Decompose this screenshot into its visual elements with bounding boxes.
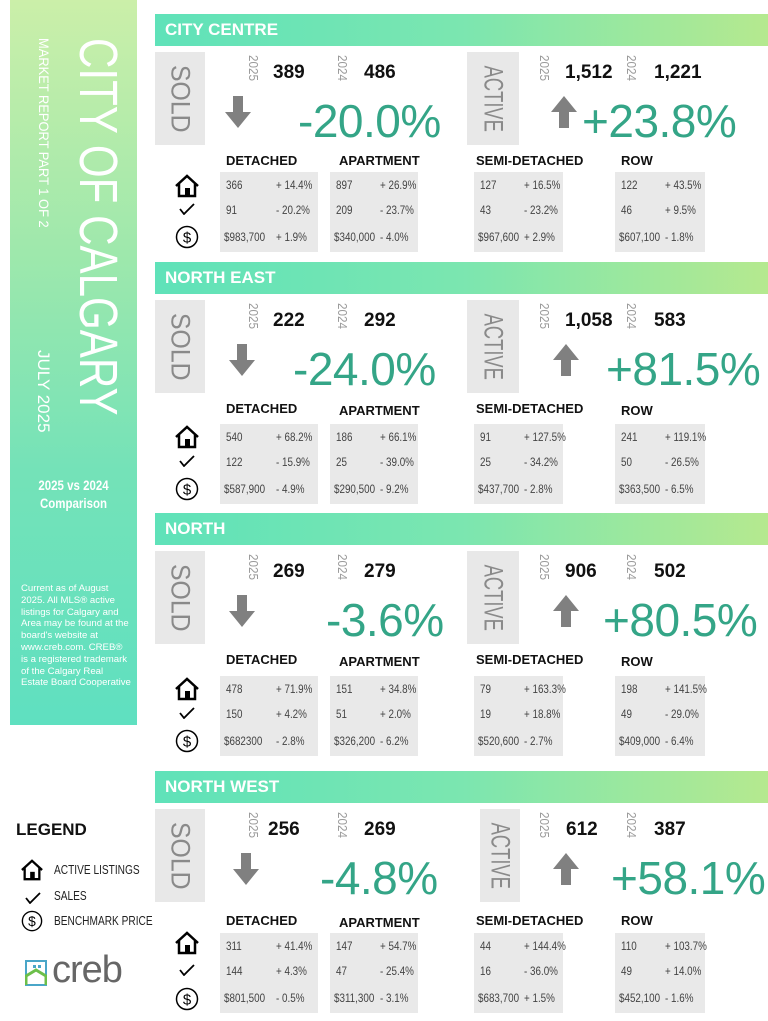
sold numbers — [246, 554, 396, 582]
table: semi-detached: + 127.5% — [524, 430, 566, 444]
table: semi-detached: + 16.5% — [524, 178, 560, 192]
section: north east: APARTMENT — [339, 403, 420, 418]
row icons — [175, 931, 199, 1010]
section: north: SEMI-DETACHED — [476, 652, 583, 667]
table: apartment: 209 — [336, 203, 352, 217]
section: north east: 2024 — [335, 303, 350, 329]
table: detached: 122 — [226, 455, 242, 469]
table: apartment: 897 — [336, 178, 352, 192]
table: row: 49 — [621, 707, 632, 721]
section: north west: 2024 — [335, 812, 350, 838]
sold numbers — [246, 812, 396, 840]
sold box: SOLD — [166, 313, 196, 380]
table: apartment: + 34.8% — [380, 682, 416, 696]
table: row: + 43.5% — [665, 178, 701, 192]
table: row: - 6.5% — [665, 482, 693, 496]
section: north east: 2025 — [246, 303, 261, 329]
table: detached: $587,900 — [224, 482, 265, 496]
section: north east: 1,058 — [565, 310, 613, 331]
table: semi-detached: 16 — [480, 964, 491, 978]
table: semi-detached: - 2.8% — [524, 482, 552, 496]
table: row: - 6.4% — [665, 734, 693, 748]
table: row: + 141.5% — [665, 682, 707, 696]
section: north west: 387 — [654, 819, 686, 840]
creb logo: creb — [52, 949, 122, 991]
section: north west: 256 — [268, 819, 300, 840]
up arrow — [553, 344, 579, 376]
table: semi-detached: - 23.2% — [524, 203, 558, 217]
section: north west — [155, 771, 768, 1013]
legend item: benchmark price — [22, 910, 153, 932]
section: north west: APARTMENT — [339, 915, 420, 930]
section: north west: 612 — [566, 819, 598, 840]
active box — [467, 52, 519, 145]
table: apartment: - 9.2% — [380, 482, 408, 496]
table: semi-detached: $967,600 — [478, 230, 519, 244]
row icons — [175, 425, 199, 500]
table: row: + 103.7% — [665, 939, 707, 953]
table: semi-detached: + 144.4% — [524, 939, 566, 953]
active box: ACTIVE — [478, 65, 508, 132]
table: detached: $801,500 — [224, 991, 265, 1005]
header — [155, 14, 768, 46]
active box — [467, 300, 519, 393]
table: semi-detached: $437,700 — [478, 482, 519, 496]
table: row — [615, 676, 705, 756]
sold box — [155, 52, 205, 145]
section: north: 906 — [565, 561, 597, 582]
sold box: SOLD — [166, 65, 196, 132]
table: semi-detached: + 18.8% — [524, 707, 560, 721]
table: detached: + 4.3% — [276, 964, 307, 978]
table: apartment: $311,300 — [334, 991, 374, 1005]
table: row: $607,100 — [619, 230, 660, 244]
table: row: 46 — [621, 203, 632, 217]
sold box: SOLD — [166, 822, 196, 889]
section: city centre: ROW — [621, 153, 653, 168]
table: semi-detached: $520,600 — [478, 734, 519, 748]
up arrow — [551, 96, 577, 128]
down arrow — [229, 595, 255, 627]
active percent: +80.5% — [603, 594, 757, 646]
section: north east: ROW — [621, 403, 653, 418]
table: row: 241 — [621, 430, 637, 444]
table: apartment: - 6.2% — [380, 734, 408, 748]
sold box — [155, 809, 205, 902]
section: north: ROW — [621, 654, 653, 669]
section: north: DETACHED — [226, 652, 297, 667]
table: semi-detached: 91 — [480, 430, 491, 444]
row icons — [175, 677, 199, 752]
header: CITY CENTRE — [165, 20, 278, 39]
table: detached: + 68.2% — [276, 430, 312, 444]
table: detached: - 2.8% — [276, 734, 304, 748]
table: row: $409,000 — [619, 734, 660, 748]
table: apartment — [330, 676, 418, 756]
section: north east: 222 — [273, 310, 305, 331]
legend item: active listings: ACTIVE LISTINGS — [54, 862, 140, 877]
table: detached: - 0.5% — [276, 991, 304, 1005]
table: apartment: $290,500 — [334, 482, 375, 496]
sold percent: -24.0% — [293, 343, 436, 395]
table: semi-detached: - 34.2% — [524, 455, 558, 469]
header — [155, 513, 768, 545]
table: row: + 14.0% — [665, 964, 701, 978]
section: north east — [155, 262, 768, 504]
section: north west: 2025 — [537, 812, 552, 838]
table: semi-detached — [474, 933, 563, 1013]
active percent: +58.1% — [611, 852, 765, 904]
table: semi-detached: - 2.7% — [524, 734, 552, 748]
table: detached: 91 — [226, 203, 237, 217]
section: north: 269 — [273, 561, 305, 582]
header: NORTH EAST — [165, 268, 276, 287]
table: detached: $983,700 — [224, 230, 265, 244]
header: NORTH — [165, 519, 225, 538]
table: row: - 1.8% — [665, 230, 693, 244]
table: detached: + 1.9% — [276, 230, 307, 244]
table: detached: 366 — [226, 178, 242, 192]
table: row: 198 — [621, 682, 637, 696]
section: north: 2024 — [624, 554, 639, 580]
section: north: 2024 — [335, 554, 350, 580]
section: north east: 292 — [364, 310, 396, 331]
header — [155, 771, 768, 803]
table: detached — [220, 424, 318, 504]
section: north west: 2024 — [624, 812, 639, 838]
legend item: benchmark price: BENCHMARK PRICE — [54, 913, 153, 928]
section: city centre: APARTMENT — [339, 153, 420, 168]
section: city centre: SEMI-DETACHED — [476, 153, 583, 168]
section: north: 279 — [364, 561, 396, 582]
table: semi-detached: - 36.0% — [524, 964, 558, 978]
table: detached: 311 — [226, 939, 242, 953]
active percent: +23.8% — [582, 95, 736, 147]
active percent: +81.5% — [606, 343, 760, 395]
legend item: sales — [25, 888, 87, 904]
table: row: 122 — [621, 178, 637, 192]
sold box: SOLD — [166, 564, 196, 631]
section: city centre: 2025 — [246, 55, 261, 81]
table: apartment: - 39.0% — [380, 455, 414, 469]
sold percent: -4.8% — [320, 852, 438, 904]
section: north west: 269 — [364, 819, 396, 840]
row icons: $ — [183, 992, 192, 1008]
section: city centre: 389 — [273, 62, 305, 83]
table: row: - 1.6% — [665, 991, 693, 1005]
legend item: sales: SALES — [54, 888, 87, 903]
legend item: active listings — [21, 859, 140, 880]
section: city centre: 1,512 — [565, 62, 613, 83]
comparison label — [38, 477, 109, 511]
table: apartment: $340,000 — [334, 230, 375, 244]
up arrow — [553, 595, 579, 627]
row icons: $ — [183, 230, 192, 246]
table: semi-detached: + 163.3% — [524, 682, 566, 696]
column headings — [226, 401, 653, 418]
comparison label: 2025 vs 2024 — [38, 477, 109, 493]
table: semi-detached: 44 — [480, 939, 491, 953]
section: north west: ROW — [621, 913, 653, 928]
sidebar date: JULY 2025 — [34, 350, 53, 433]
active numbers — [537, 303, 686, 331]
table: semi-detached — [474, 676, 563, 756]
section: north — [155, 513, 768, 756]
table: semi-detached — [474, 424, 563, 504]
header — [155, 262, 768, 294]
table: apartment — [330, 424, 418, 504]
active box — [467, 551, 519, 644]
table: apartment: + 2.0% — [380, 707, 411, 721]
table: detached: 540 — [226, 430, 242, 444]
table: apartment: 151 — [336, 682, 352, 696]
table: semi-detached: 43 — [480, 203, 491, 217]
table: detached: - 15.9% — [276, 455, 310, 469]
header: NORTH WEST — [165, 777, 279, 796]
table: apartment — [330, 172, 418, 252]
sidebar subtitle: MARKET REPORT PART 1 OF 2 — [36, 38, 52, 228]
active box: ACTIVE — [486, 822, 516, 889]
table: apartment: + 26.9% — [380, 178, 416, 192]
footnote: Current as of August 2025. All MLS® active listings for Calgary and Area may be found at the board's website at www.creb.com. CREB® is a registered trademark of the Calgary Real Estate Board Cooperative — [21, 583, 131, 688]
section: city centre: 2024 — [624, 55, 639, 81]
active numbers — [537, 812, 686, 840]
table: row: + 119.1% — [665, 430, 706, 444]
table: detached: 478 — [226, 682, 242, 696]
table: semi-detached: 79 — [480, 682, 491, 696]
section: city centre: DETACHED — [226, 153, 297, 168]
sold percent: -3.6% — [326, 594, 444, 646]
table: row: 49 — [621, 964, 632, 978]
sold box — [155, 300, 205, 393]
sidebar title: CITY OF CALGARY — [68, 38, 128, 416]
table: detached: 150 — [226, 707, 242, 721]
table: apartment: + 54.7% — [380, 939, 416, 953]
column headings — [226, 652, 653, 669]
section: north west: DETACHED — [226, 913, 297, 928]
section: north east: 2024 — [624, 303, 639, 329]
table: row: - 26.5% — [665, 455, 699, 469]
sold box — [155, 551, 205, 644]
section: city centre — [155, 14, 768, 252]
legend — [16, 820, 153, 932]
table: apartment: 186 — [336, 430, 352, 444]
comparison label: Comparison — [40, 495, 107, 511]
section: north: 502 — [654, 561, 686, 582]
section: city centre: 2024 — [335, 55, 350, 81]
active box: ACTIVE — [478, 564, 508, 631]
table: row: $363,500 — [619, 482, 660, 496]
section: north: 2025 — [246, 554, 261, 580]
table: semi-detached: 25 — [480, 455, 491, 469]
column headings — [226, 153, 653, 168]
table: apartment: 25 — [336, 455, 347, 469]
table: detached: + 14.4% — [276, 178, 312, 192]
table: apartment — [330, 933, 418, 1013]
active numbers — [537, 554, 686, 582]
table: apartment: + 66.1% — [380, 430, 416, 444]
table: detached: 144 — [226, 964, 242, 978]
section: city centre: 1,221 — [654, 62, 702, 83]
table: apartment: - 3.1% — [380, 991, 408, 1005]
section: north: APARTMENT — [339, 654, 420, 669]
table: detached: - 4.9% — [276, 482, 304, 496]
down arrow — [233, 853, 259, 885]
up arrow — [553, 853, 579, 885]
section: north east: 2025 — [537, 303, 552, 329]
row icons — [175, 174, 199, 248]
active numbers — [537, 55, 702, 83]
table: apartment: - 4.0% — [380, 230, 408, 244]
table: semi-detached: $683,700 — [478, 991, 519, 1005]
table: row: - 29.0% — [665, 707, 699, 721]
table: apartment: - 23.7% — [380, 203, 414, 217]
section: north east: DETACHED — [226, 401, 297, 416]
table: detached: - 20.2% — [276, 203, 310, 217]
table: detached — [220, 172, 318, 252]
table: semi-detached: 127 — [480, 178, 496, 192]
table: row: + 9.5% — [665, 203, 696, 217]
section: north west: 2025 — [246, 812, 261, 838]
table: apartment: 147 — [336, 939, 352, 953]
table: row — [615, 172, 705, 252]
table: detached: $682300 — [224, 734, 262, 748]
table: semi-detached: + 1.5% — [524, 991, 555, 1005]
legend title: LEGEND — [16, 820, 87, 839]
active box: ACTIVE — [478, 313, 508, 380]
table: detached — [220, 933, 318, 1013]
sidebar — [10, 0, 137, 725]
table: apartment: - 25.4% — [380, 964, 414, 978]
table: detached: + 71.9% — [276, 682, 312, 696]
active box — [480, 809, 520, 902]
table: detached: + 4.2% — [276, 707, 307, 721]
table: apartment: 51 — [336, 707, 347, 721]
legend item: benchmark price: $ — [28, 914, 36, 929]
section: city centre: 2025 — [537, 55, 552, 81]
table: row: $452,100 — [619, 991, 660, 1005]
section: north west: SEMI-DETACHED — [476, 913, 583, 928]
table: row: 50 — [621, 455, 632, 469]
table: row — [615, 933, 705, 1013]
down arrow — [229, 344, 255, 376]
row icons: $ — [183, 482, 192, 498]
section: north east: SEMI-DETACHED — [476, 401, 583, 416]
table: semi-detached: + 2.9% — [524, 230, 555, 244]
table: apartment: $326,200 — [334, 734, 375, 748]
row icons: $ — [183, 734, 192, 750]
table: row — [615, 424, 705, 504]
sold numbers — [246, 55, 396, 83]
table: semi-detached — [474, 172, 563, 252]
sold numbers — [246, 303, 396, 331]
table: semi-detached: 19 — [480, 707, 491, 721]
table: detached: + 41.4% — [276, 939, 312, 953]
column headings — [226, 913, 653, 930]
table: apartment: 47 — [336, 964, 347, 978]
down arrow — [225, 96, 251, 128]
section: city centre: 486 — [364, 62, 396, 83]
sold percent: -20.0% — [298, 95, 441, 147]
table: detached — [220, 676, 318, 756]
section: north: 2025 — [537, 554, 552, 580]
table: row: 110 — [621, 939, 637, 953]
section: north east: 583 — [654, 310, 686, 331]
